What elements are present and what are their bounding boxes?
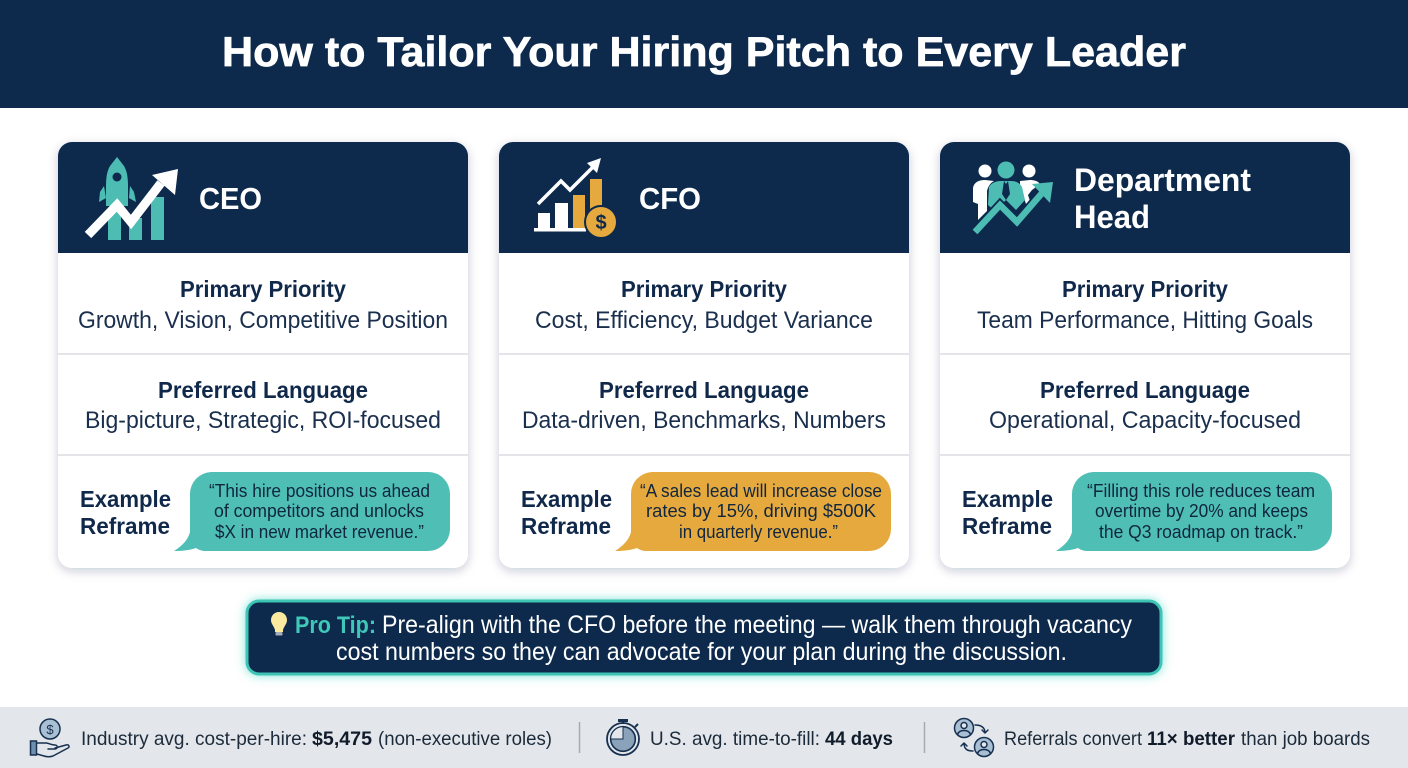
speech bubble: CFO example: rates by 15%, driving $500K: [646, 501, 876, 521]
icon: light bulb: [271, 612, 287, 636]
pro tip text: Pre-align with the CFO before the meeting — walk them through vacancy: [382, 611, 1132, 639]
speech bubble: CEO example: “This hire positions us ahead: [209, 481, 430, 501]
stat: referrals: than job boards: [1241, 728, 1370, 750]
example reframe label: Reframe: [80, 513, 170, 539]
example reframe label: [80, 486, 171, 539]
stat: time to fill: 44 days: [825, 728, 893, 750]
speech bubble: CEO example: [174, 472, 450, 551]
primary priority: Primary Priority: [180, 276, 346, 302]
preferred language: Data-driven, Benchmarks, Numbers: [522, 407, 886, 434]
stat: cost per hire: $5,475: [312, 728, 372, 750]
preferred language: [85, 377, 441, 434]
speech bubble: CFO example: [615, 472, 891, 551]
icon: bar chart with coin: [534, 158, 617, 238]
icon: hand with coin: $: [46, 722, 54, 737]
stat: referrals: [954, 718, 1370, 756]
example reframe label: Reframe: [962, 513, 1052, 539]
example reframe label: Example: [962, 486, 1053, 512]
stat: cost per hire: [30, 719, 552, 757]
primary priority: Team Performance, Hitting Goals: [977, 307, 1313, 334]
primary priority: Growth, Vision, Competitive Position: [78, 307, 448, 334]
speech bubble: CEO example: of competitors and unlocks: [214, 501, 424, 521]
primary priority: Cost, Efficiency, Budget Variance: [535, 307, 873, 334]
role name: Department Head: Department: [1074, 162, 1251, 198]
speech bubble: CFO example: “A sales lead will increase close: [640, 481, 882, 501]
icon: referral exchange: [954, 718, 994, 756]
preferred language: [989, 377, 1301, 434]
pro tip text: [295, 611, 1132, 666]
preferred language: Preferred Language: [158, 377, 368, 403]
stat: cost per hire: (non-executive roles): [378, 728, 552, 750]
panel: CFO: [499, 142, 909, 568]
pro tip text: cost numbers so they can advocate for your plan during the discussion.: [336, 638, 1067, 666]
preferred language: [522, 377, 886, 434]
example reframe label: Example: [521, 486, 612, 512]
icon: stopwatch: [607, 719, 639, 755]
primary priority: Primary Priority: [1062, 276, 1228, 302]
primary priority: [977, 276, 1313, 334]
role name: Department Head: Head: [1074, 199, 1150, 235]
role name: CEO: CEO: [199, 181, 262, 216]
title: How to Tailor Your Hiring Pitch to Every Leader: [222, 28, 1186, 75]
panel: CEO: [58, 142, 468, 568]
example reframe label: [962, 486, 1053, 539]
primary priority: Primary Priority: [621, 276, 787, 302]
footer stats bar: [0, 707, 1408, 768]
preferred language: Preferred Language: [599, 377, 809, 403]
stat: time to fill: [607, 719, 893, 755]
icon: hand with coin: [30, 719, 69, 757]
example reframe label: Example: [80, 486, 171, 512]
stat: time to fill: U.S. avg. time-to-fill:: [650, 728, 820, 750]
primary priority: [78, 276, 448, 334]
callout: pro tip: [247, 601, 1161, 674]
pro tip text: Pro Tip:: [295, 612, 376, 639]
speech bubble: Department Head example: the Q3 roadmap on track.”: [1099, 522, 1303, 542]
stat: cost per hire: Industry avg. cost-per-hire:: [81, 728, 307, 750]
stat: referrals: Referrals convert: [1004, 728, 1143, 750]
speech bubble: Department Head example: overtime by 20% and keeps: [1095, 501, 1308, 521]
primary priority: [535, 276, 873, 334]
stat: referrals: 11× better: [1147, 728, 1235, 750]
icon: team with arrow: [973, 162, 1053, 232]
speech bubble: CEO example: $X in new market revenue.”: [215, 522, 424, 542]
speech bubble: Department Head example: [1056, 472, 1332, 551]
icon: rocket and growth arrow: [88, 157, 178, 240]
speech bubble: Department Head example: “Filling this role reduces team: [1087, 481, 1315, 501]
preferred language: Big-picture, Strategic, ROI-focused: [85, 407, 441, 434]
title banner: [0, 0, 1408, 108]
example reframe label: [521, 486, 612, 539]
preferred language: Operational, Capacity-focused: [989, 407, 1301, 434]
role name: CFO: CFO: [639, 181, 701, 216]
panel: Department Head: [940, 142, 1350, 568]
example reframe label: Reframe: [521, 513, 611, 539]
speech bubble: CFO example: in quarterly revenue.”: [679, 522, 838, 542]
role name: Department Head: [1074, 162, 1251, 235]
icon: bar chart with coin: $: [595, 212, 607, 234]
preferred language: Preferred Language: [1040, 377, 1250, 403]
